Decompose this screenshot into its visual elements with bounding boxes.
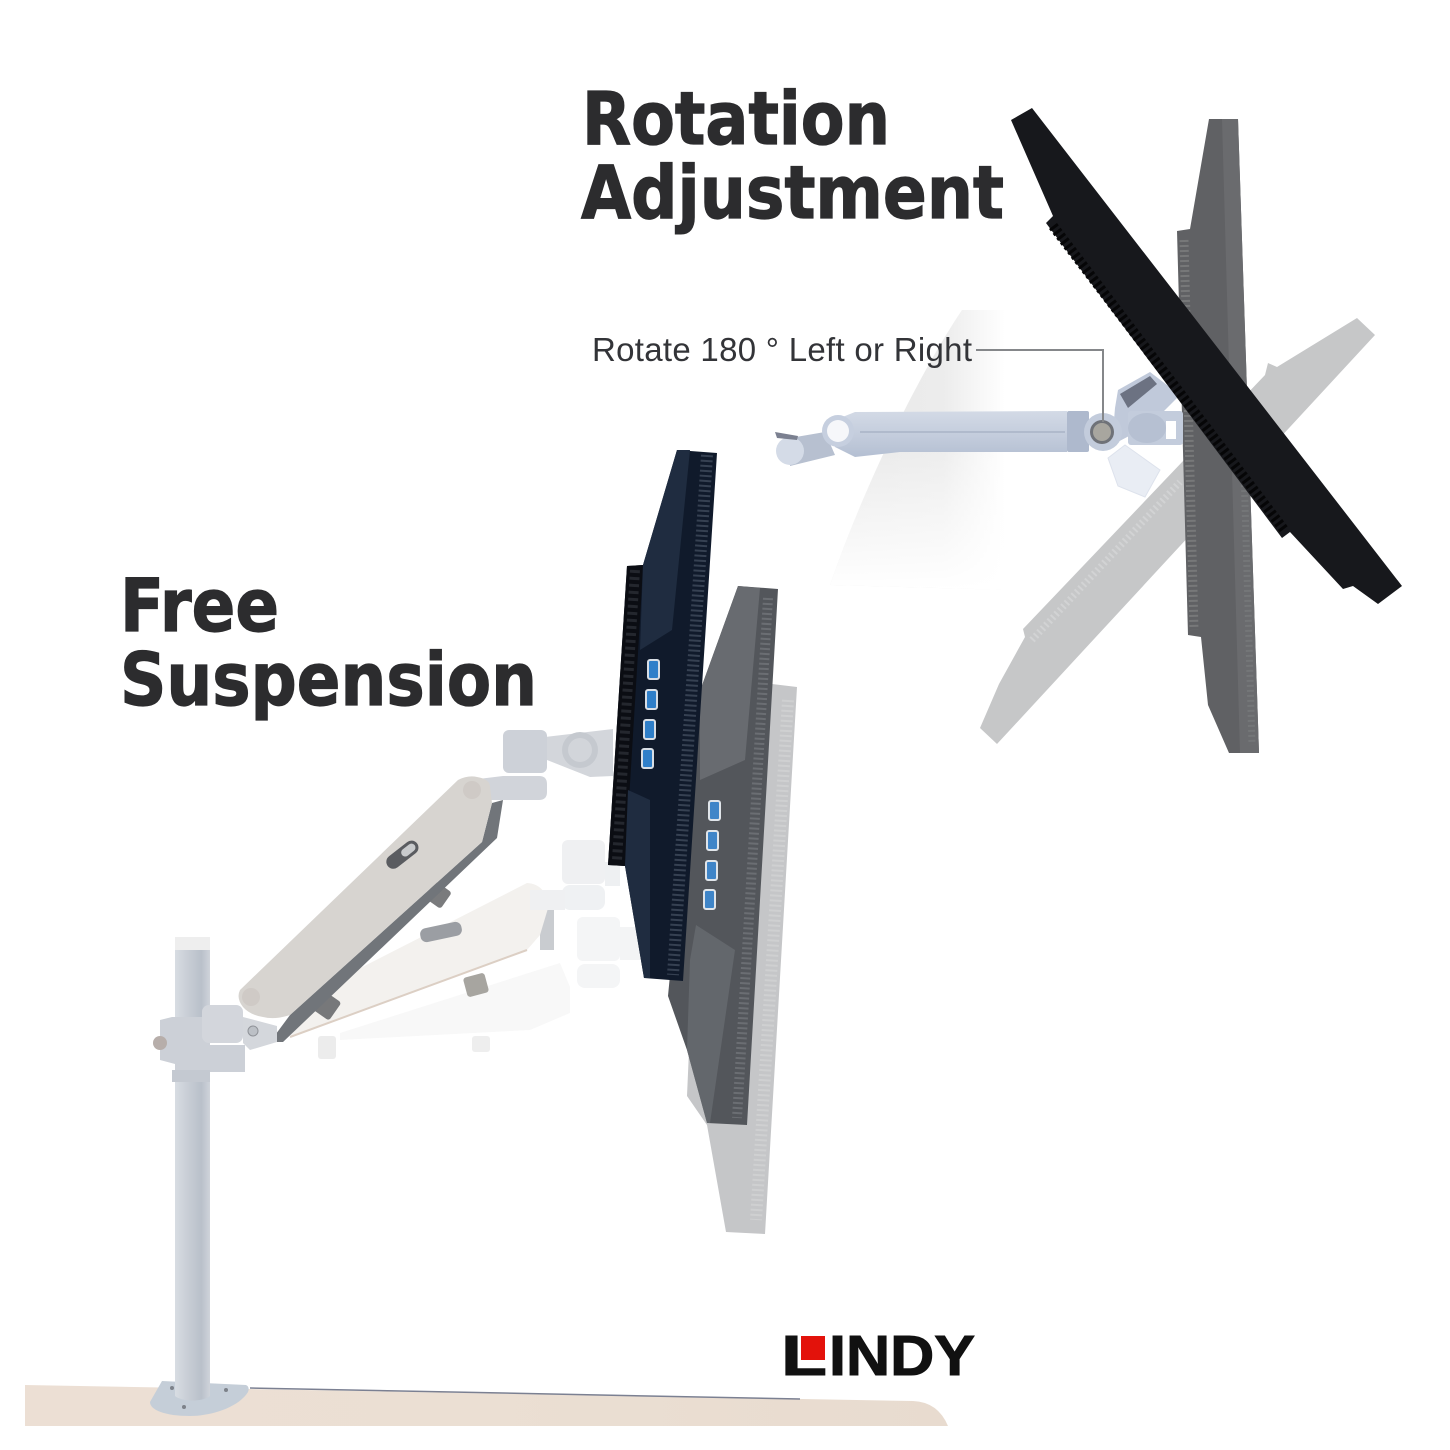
suspension group: mid monitor (668, 586, 778, 1125)
caps (242, 988, 260, 1006)
arm body (239, 776, 492, 1018)
callout label: Rotate 180 ° Left or Right (592, 331, 972, 368)
rotation group: black monitor (1011, 108, 1402, 604)
pivot ring (822, 415, 854, 447)
small mount detail (1120, 376, 1157, 408)
lowest ghost arm (318, 917, 640, 1059)
pole joint (153, 1005, 277, 1082)
desk surface (25, 1385, 948, 1426)
rotation group: gray monitor (1177, 119, 1259, 753)
heading: Free Suspension (120, 564, 537, 723)
dark gas spring bracket (270, 800, 503, 1042)
connector (1067, 411, 1089, 452)
fog shadow behind rotation arm (830, 310, 1010, 590)
usb ports (642, 660, 659, 768)
callout leader line (976, 350, 1103, 422)
LINDY logo: INDY (829, 1324, 975, 1388)
end cap (790, 432, 835, 466)
lower ghost bracket (1108, 445, 1160, 497)
bracket plate (1128, 411, 1183, 445)
middle ghost arm (290, 840, 620, 1037)
suspension group: lightest monitor (687, 684, 797, 1234)
slot handle (384, 838, 421, 872)
LINDY logo: L (781, 1324, 827, 1388)
suspension group: black monitor (608, 450, 717, 981)
usb ports (704, 801, 720, 909)
knobs (424, 881, 452, 909)
rotation arm (775, 372, 1183, 497)
rotation group: ghost monitor (980, 318, 1375, 744)
pole (175, 937, 210, 1400)
upper bracket (1112, 372, 1180, 445)
heading: Free Suspension: Suspension (120, 638, 537, 723)
pole clamp base (150, 1378, 249, 1416)
arm tube (835, 411, 1067, 457)
heading: Rotation Adjustment: Rotation (582, 77, 890, 162)
red square (801, 1336, 825, 1360)
rotation joint (1084, 413, 1122, 451)
heading: Free Suspension: Free (120, 564, 279, 649)
heading: Rotation Adjustment: Adjustment (581, 151, 1004, 236)
heading: Rotation Adjustment (581, 77, 1004, 236)
top swivel head (545, 729, 613, 777)
main arm assembly (239, 729, 613, 1042)
